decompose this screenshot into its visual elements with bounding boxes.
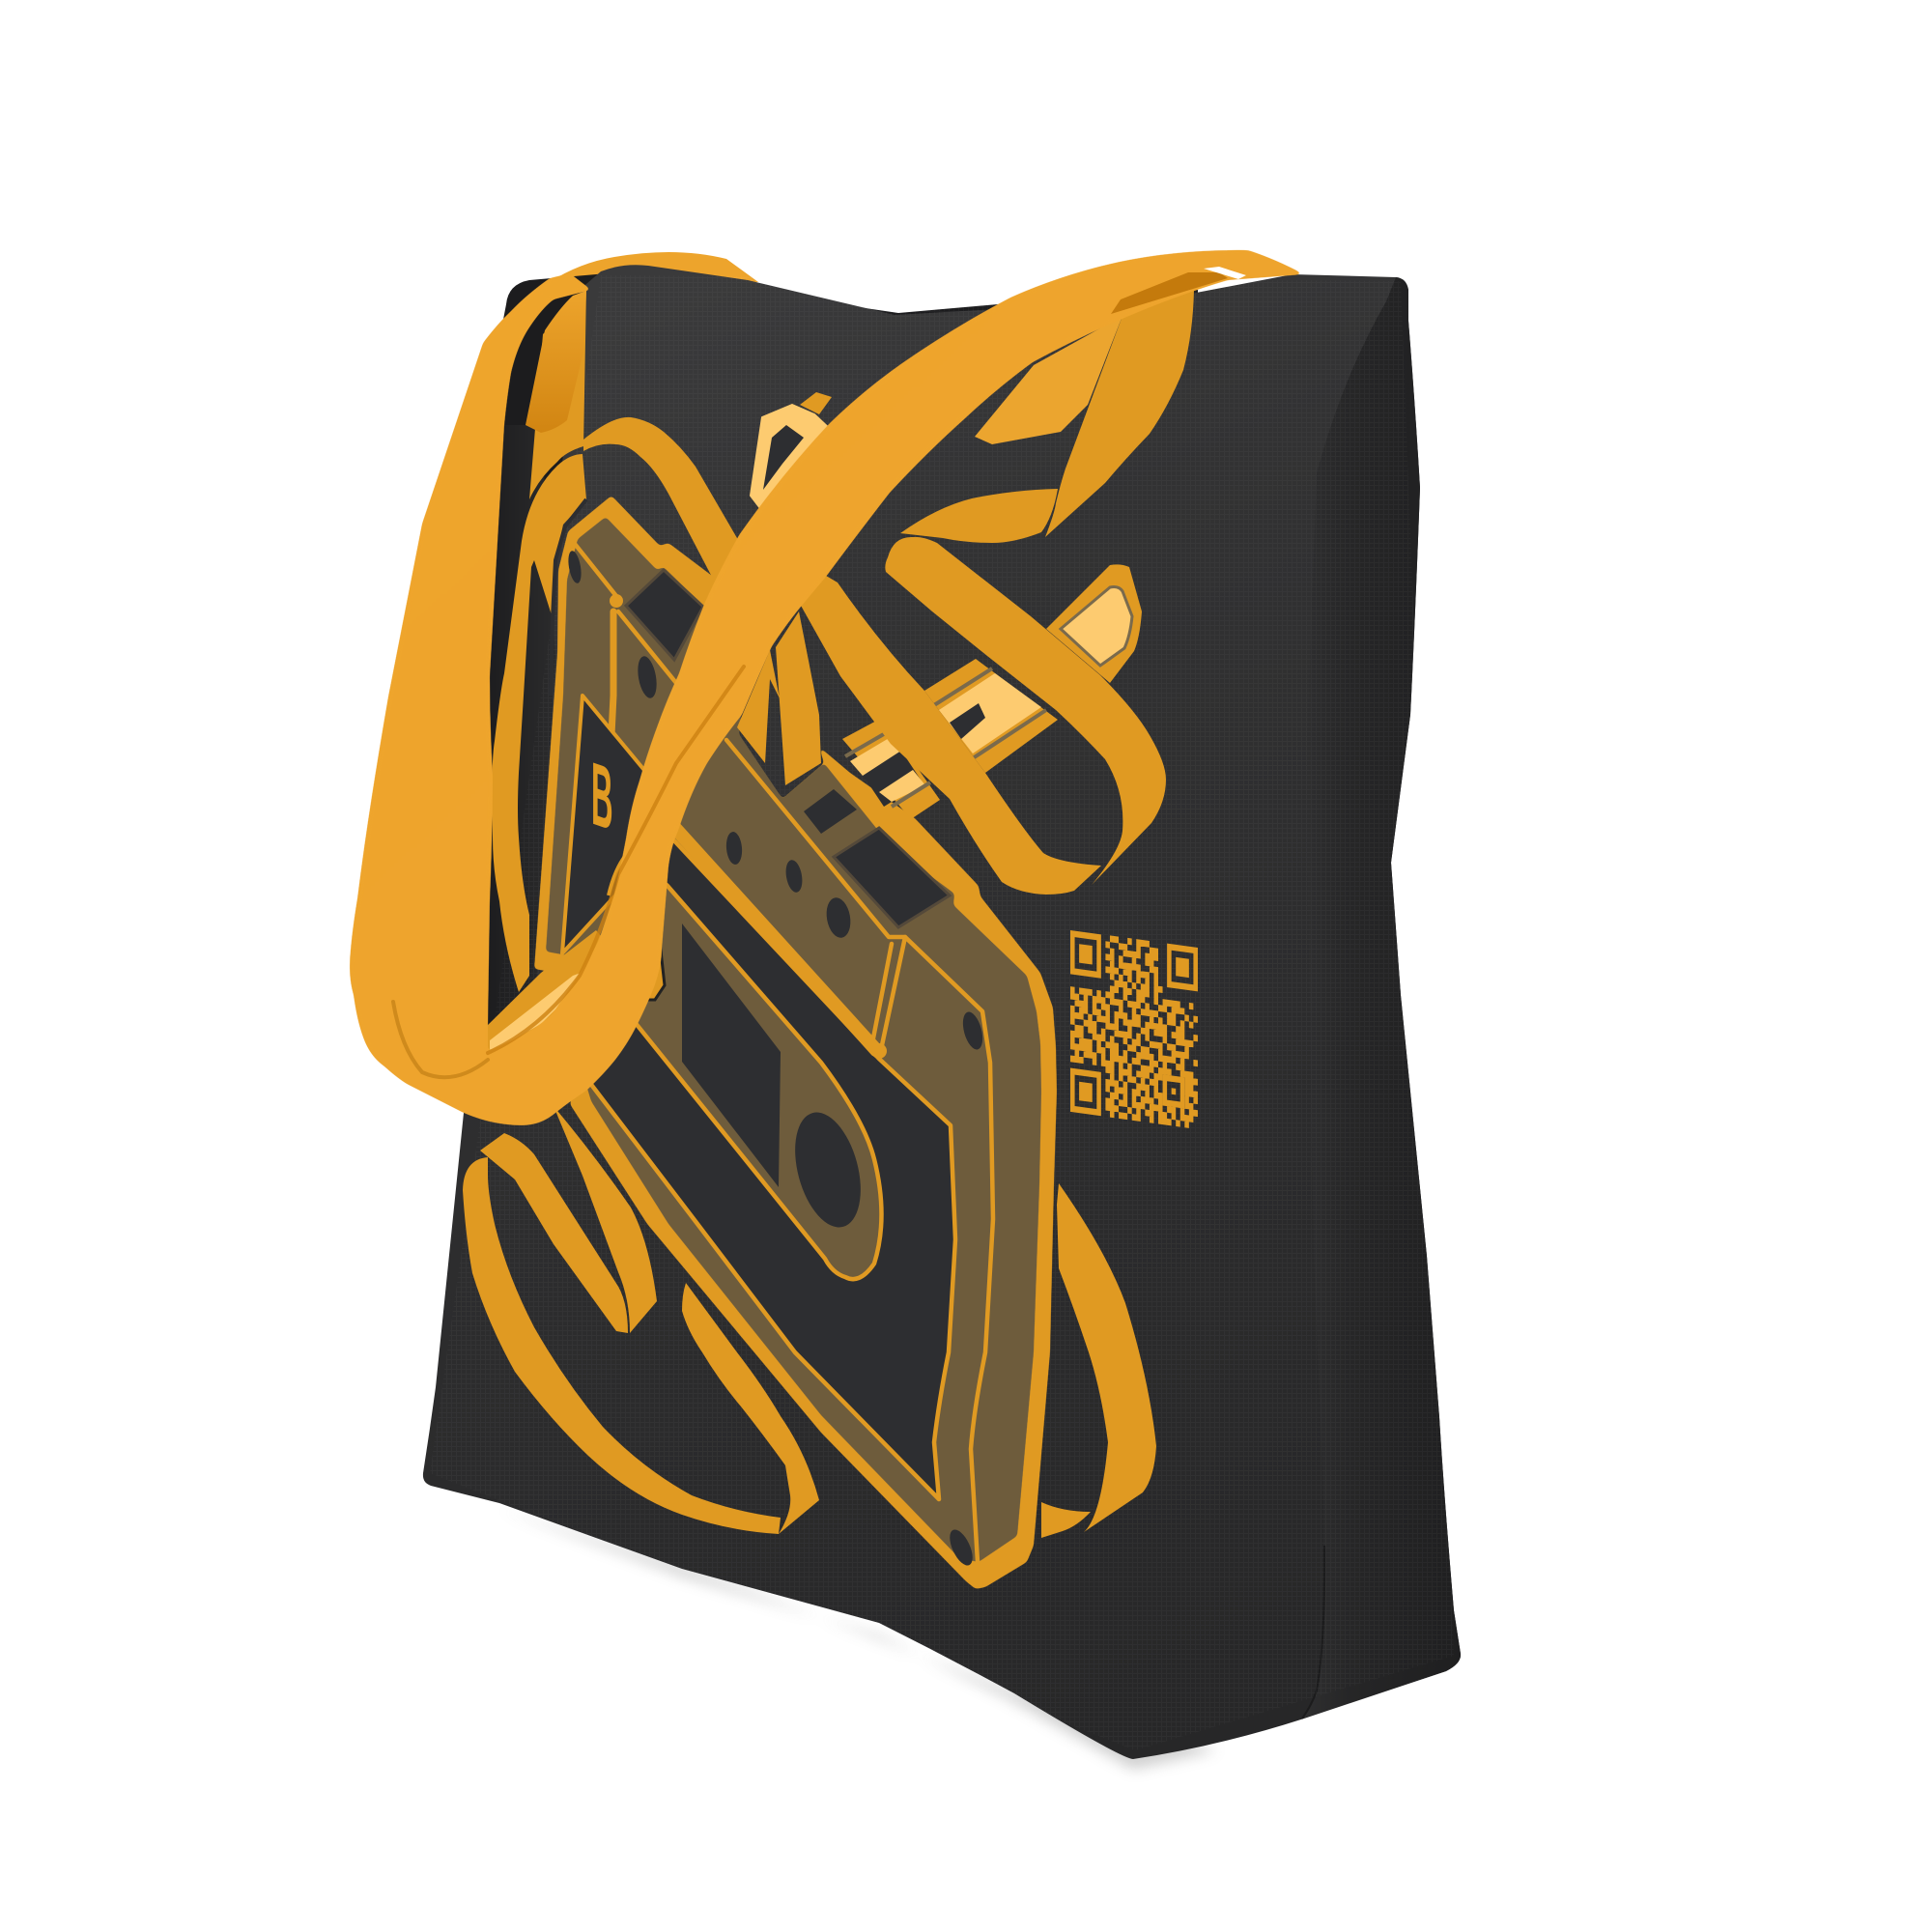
print: lower left ribbon big loop	[463, 1157, 781, 1534]
print: cassette side dark panel with letter	[562, 696, 667, 953]
print: ribbon upper right twist	[900, 290, 1194, 543]
QR code	[1070, 930, 1198, 1129]
print: tape ribbon top-left arc	[492, 289, 763, 992]
print: ribbon long middle strand	[800, 570, 1101, 895]
print: lower left second ribbon	[554, 1106, 657, 1333]
print: thick upper edge of face	[671, 824, 876, 1050]
print: lower-left end of cassette tape	[486, 843, 665, 1055]
strap: folds and shading	[393, 667, 744, 1077]
strap tab right	[975, 316, 1122, 444]
strap: underside at right end	[1111, 267, 1246, 314]
print: small reel tab at top	[751, 392, 832, 512]
print: lower centre ribbon	[682, 1283, 819, 1534]
print: cassette main dark face	[580, 836, 955, 1499]
print: ribbon folds near strap	[737, 611, 821, 785]
bag: side gusset	[1302, 277, 1461, 1719]
bag: back panel	[473, 272, 1198, 1063]
print: dark keyline on cassette corner	[551, 499, 586, 696]
bag: left dark shade	[464, 425, 555, 1113]
print: cassette olive body	[546, 517, 1041, 1562]
print: cassette outer outline	[534, 496, 1057, 1589]
print: spine lines and fold	[575, 544, 993, 1562]
print: tape strips lower group	[842, 718, 940, 819]
print: tape strips upper group	[924, 659, 1058, 773]
bag: fold seam	[1302, 1546, 1324, 1719]
print: label ring with hub hole and window	[618, 860, 881, 1279]
print: ribbon loop right	[885, 537, 1166, 885]
print: lower right ribbon	[1041, 1183, 1156, 1538]
strap: main loop	[350, 250, 1304, 1125]
print: screw holes	[566, 550, 986, 1569]
ground shadow	[499, 1509, 1217, 1770]
bag: front panel	[423, 265, 1461, 1759]
print: lower left short ribbon	[480, 1133, 628, 1333]
bag: fabric weave	[430, 275, 1454, 1750]
print: slots	[626, 570, 950, 927]
print: cassette tape end upper right	[1046, 564, 1142, 683]
strap tab left	[526, 291, 586, 433]
strap: back arc behind the bag	[550, 252, 758, 295]
print: cassette side dark panel with letter: B	[591, 742, 613, 850]
